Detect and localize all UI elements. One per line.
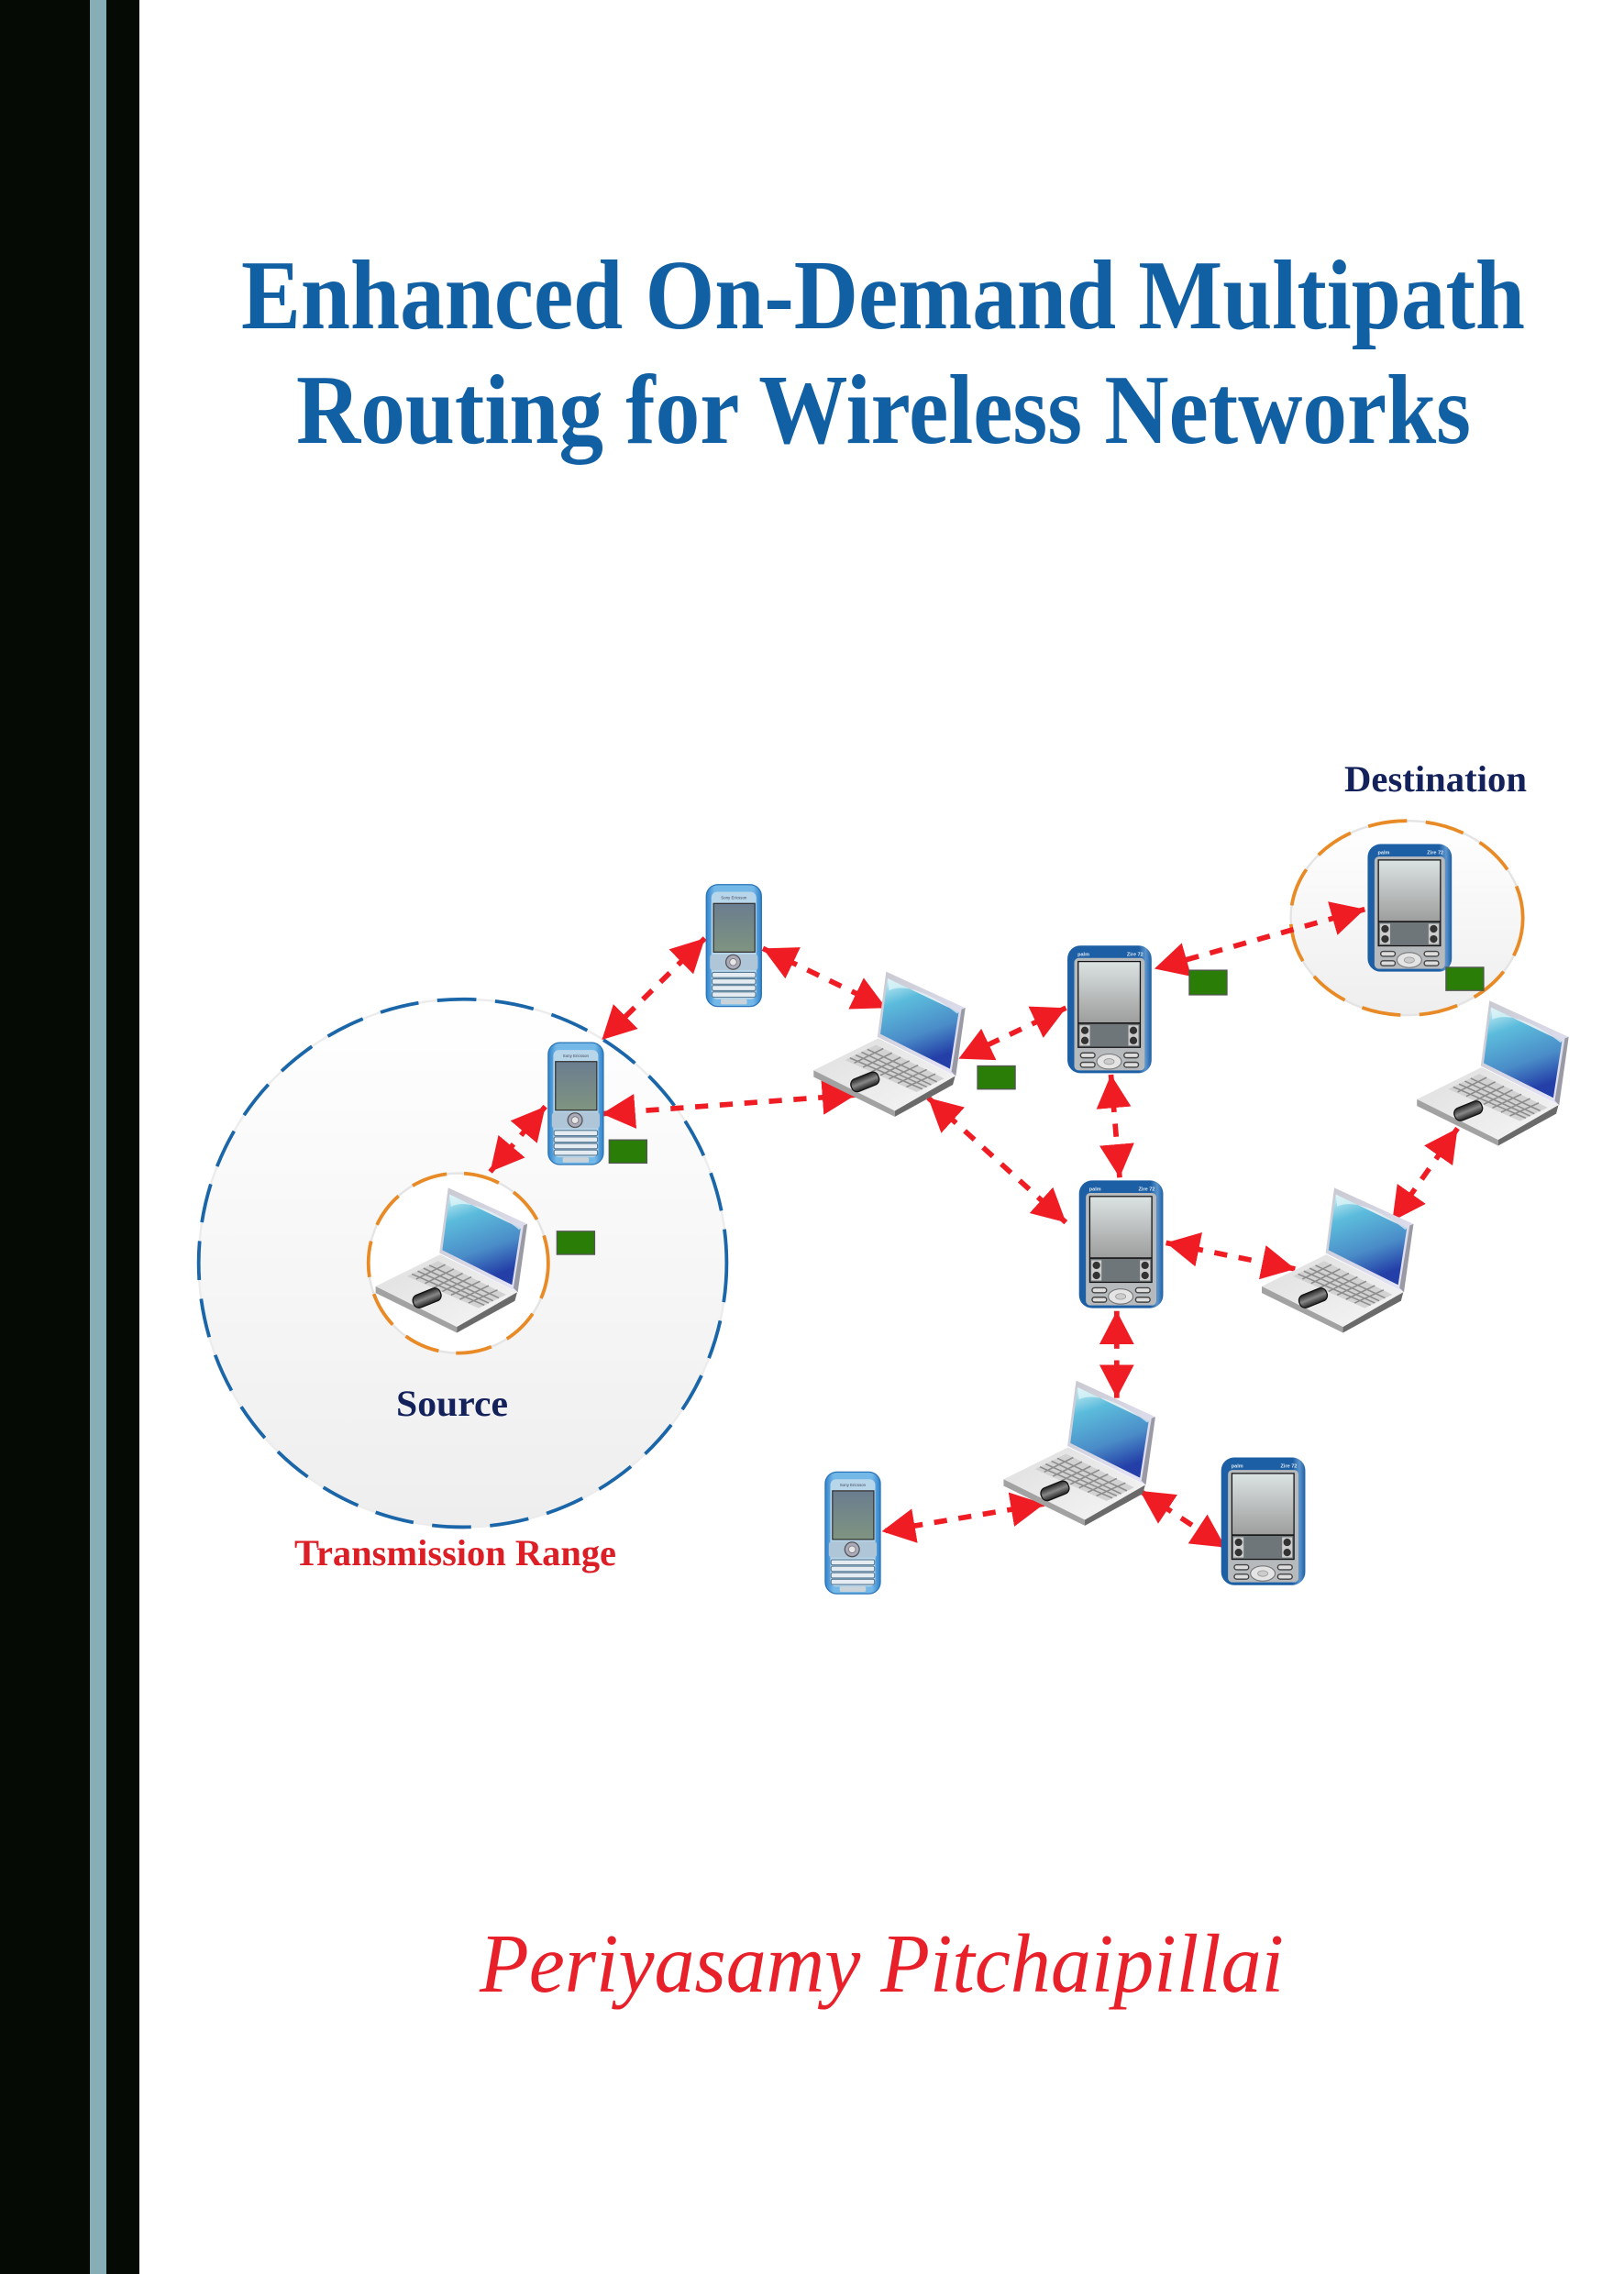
label: destination: Destination — [1344, 758, 1527, 800]
source range circle — [369, 1174, 548, 1353]
spine: left black band — [0, 0, 139, 2274]
label: source: Source — [396, 1383, 508, 1424]
title: Routing for Wireless Networks — [296, 356, 1471, 465]
laptop: middle right — [1262, 1187, 1413, 1332]
phone: bottom — [825, 1472, 880, 1594]
destination range circle — [1291, 821, 1523, 1015]
title — [241, 241, 1525, 465]
data packets — [557, 967, 1484, 1254]
laptop: centre — [813, 972, 966, 1117]
phone: near source — [548, 1043, 603, 1165]
author: Periyasamy Pitchaipillai — [479, 1917, 1284, 2010]
pda: destination — [1367, 844, 1452, 972]
laptop: bottom — [1003, 1381, 1155, 1526]
title: Enhanced On-Demand Multipath — [241, 241, 1525, 350]
transmission range circle — [199, 999, 726, 1527]
network diagram — [199, 758, 1569, 1594]
dashed link arrows — [491, 910, 1458, 1548]
pda: middle — [1079, 1180, 1163, 1308]
pda: upper centre — [1067, 945, 1152, 1073]
phone: top — [706, 885, 761, 1007]
pda: bottom right — [1221, 1458, 1305, 1585]
label: transmission range: Transmission Range — [294, 1532, 616, 1573]
laptop: source — [376, 1187, 527, 1332]
laptop: top right — [1417, 1000, 1569, 1145]
